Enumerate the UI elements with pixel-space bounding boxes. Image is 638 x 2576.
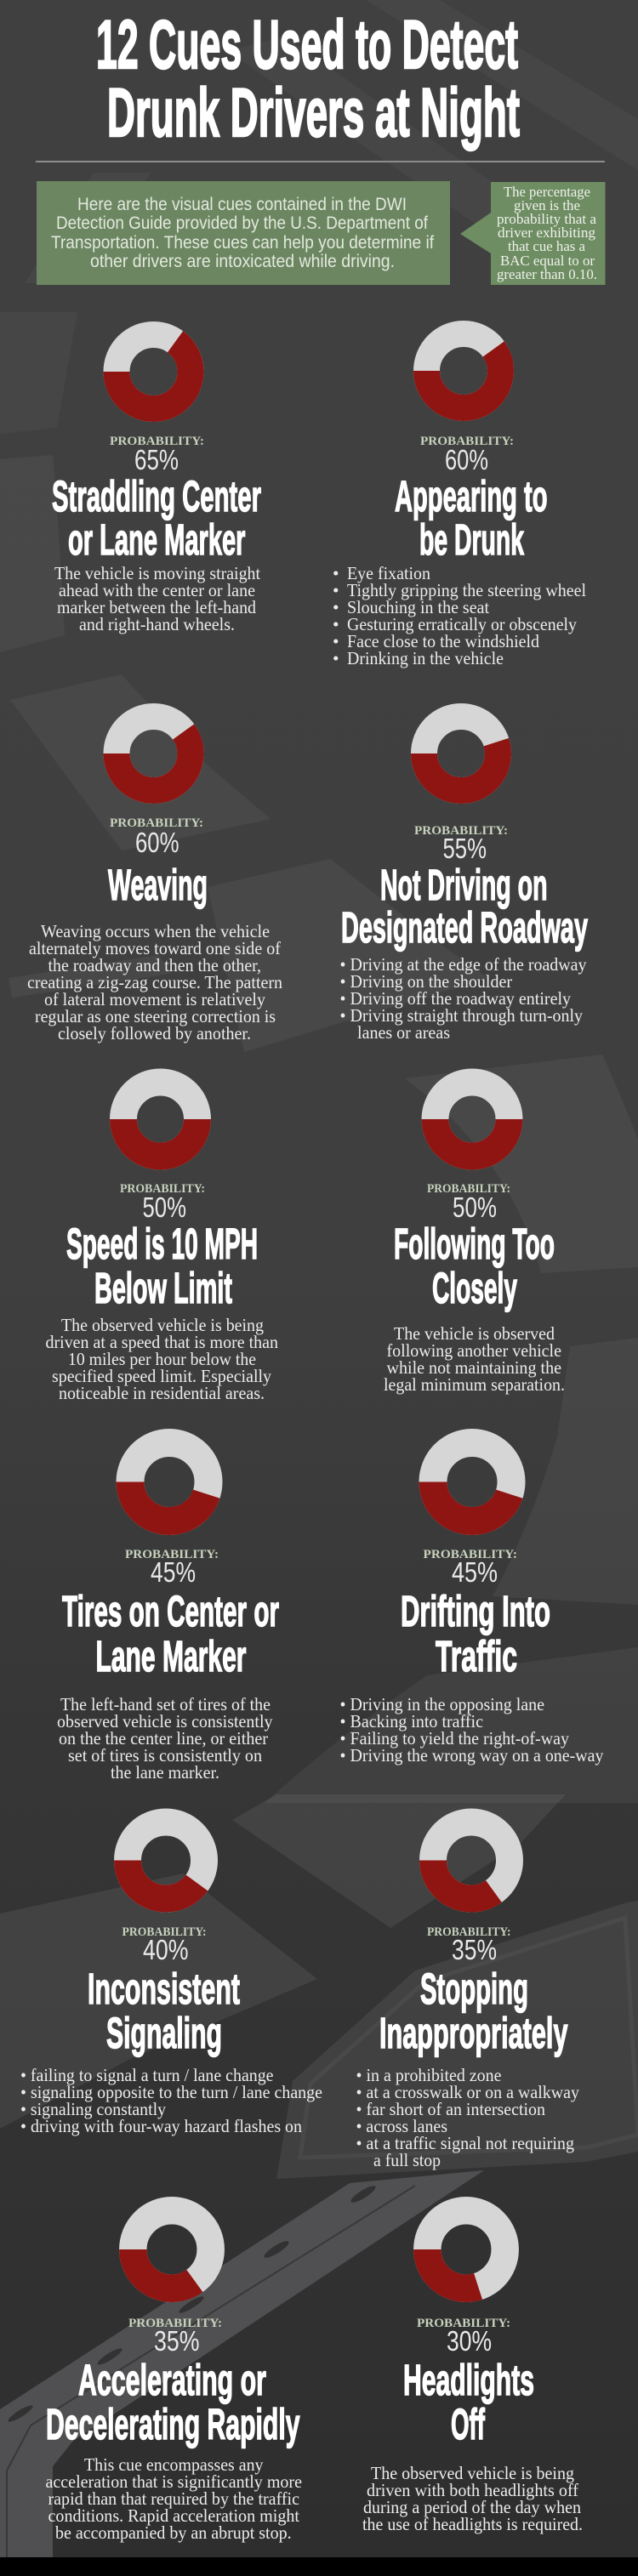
intro panel: Here are the visual cues contained in the DWI xyxy=(77,195,407,214)
description: rapid than that required by the traffic xyxy=(48,2488,299,2509)
description: creating a zig-zag course. The pattern xyxy=(27,972,282,992)
bullet list: Drinking in the vehicle xyxy=(347,648,504,668)
bullet list: • Driving off the roadway entirely xyxy=(340,988,571,1009)
description: Weaving occurs when the vehicle xyxy=(41,921,270,941)
probability value: 35% xyxy=(452,1934,497,1965)
bullet list: • Backing into traffic xyxy=(340,1711,483,1732)
bullet list: Slouching in the seat xyxy=(347,597,489,617)
bullet list: Eye fixation xyxy=(347,563,430,583)
panel: Weaving xyxy=(27,716,282,1043)
probability value: 55% xyxy=(442,833,487,864)
heading: Signaling xyxy=(106,2009,222,2057)
description: while not maintaining the xyxy=(386,1357,561,1378)
donut 50% xyxy=(123,1082,197,1157)
heading: Stopping xyxy=(420,1965,528,2013)
bullet list: lanes or areas xyxy=(357,1022,450,1043)
description: on the the center line, or either xyxy=(59,1728,268,1749)
donut 50% xyxy=(436,1082,509,1157)
bullet list xyxy=(356,2065,579,2170)
bullet list: • xyxy=(333,614,339,634)
heading xyxy=(395,472,548,564)
probability value: 50% xyxy=(453,1191,497,1223)
donut 35% xyxy=(433,1822,510,1898)
donut 45% xyxy=(130,1442,208,1521)
probability value: 50% xyxy=(143,1191,186,1223)
description: during a period of the day when xyxy=(363,2497,581,2517)
description: the use of headlights is required. xyxy=(362,2514,583,2534)
panel: Not Driving on Designated Roadway xyxy=(340,716,588,1043)
probability value: 60% xyxy=(445,444,488,475)
probability label: PROBABILITY: xyxy=(420,435,514,448)
bullet list: • signaling constantly xyxy=(20,2099,166,2119)
bullet list: • Driving on the shoulder xyxy=(340,971,512,992)
probability label: PROBABILITY: xyxy=(110,435,204,448)
probability value: 30% xyxy=(447,2325,492,2357)
probability value: 40% xyxy=(143,1934,189,1965)
bullet list xyxy=(333,563,586,668)
probability value: 65% xyxy=(134,444,179,475)
bullet list: • xyxy=(333,597,339,617)
heading: Off xyxy=(451,2400,486,2448)
description: The observed vehicle is being xyxy=(61,1315,264,1335)
panel: Inconsistent Signaling xyxy=(20,1822,322,2136)
bullet list: • Failing to yield the right-of-way xyxy=(340,1728,569,1749)
probability label: PROBABILITY: xyxy=(417,2317,510,2330)
description: The left-hand set of tires of the xyxy=(60,1694,271,1714)
bullet list: Gesturing erratically or obscenely xyxy=(347,614,577,634)
donut 60% xyxy=(427,333,500,408)
description: The observed vehicle is being xyxy=(371,2463,574,2483)
bullet list: • Driving in the opposing lane xyxy=(340,1694,544,1714)
heading xyxy=(62,1587,279,1680)
intro panel xyxy=(37,181,450,285)
heading: Lane Marker xyxy=(95,1632,247,1680)
description: The vehicle is observed xyxy=(394,1323,555,1344)
panel: Following Too Closely xyxy=(384,1082,565,1395)
donut 35% xyxy=(133,2210,211,2289)
description: marker between the left-hand xyxy=(57,597,256,617)
heading: Closely xyxy=(432,1264,517,1312)
heading: Headlights xyxy=(403,2356,534,2404)
bullet list: • xyxy=(333,563,339,583)
donut 45% xyxy=(433,1442,511,1521)
bullet list: • far short of an intersection xyxy=(356,2099,545,2119)
bullet list: • failing to signal a turn / lane change xyxy=(20,2065,274,2085)
probability label: PROBABILITY: xyxy=(125,1548,219,1561)
probability label: PROBABILITY: xyxy=(122,1925,206,1939)
panel: Stopping Inappropriately xyxy=(356,1822,579,2170)
bullet list: Face close to the windshield xyxy=(347,631,539,651)
probability label: PROBABILITY: xyxy=(427,1182,510,1196)
heading: be Drunk xyxy=(419,515,524,564)
heading xyxy=(403,2356,534,2448)
bullet list: • at a traffic signal not requiring xyxy=(356,2133,574,2153)
description xyxy=(57,1694,273,1783)
description: set of tires is consistently on xyxy=(68,1745,262,1766)
donut 55% xyxy=(424,716,498,791)
bullet list: • in a prohibited zone xyxy=(356,2065,502,2085)
heading xyxy=(379,1965,568,2057)
description: the lane marker. xyxy=(111,1762,219,1783)
description: noticeable in residential areas. xyxy=(59,1383,265,1403)
bullet list: • signaling opposite to the turn / lane change xyxy=(20,2082,322,2102)
description: This cue encompasses any xyxy=(84,2454,264,2475)
heading: Straddling Center xyxy=(52,472,261,520)
description xyxy=(27,921,282,1043)
description: be accompanied by an abrupt stop. xyxy=(55,2522,292,2543)
description: 10 miles per hour below the xyxy=(68,1349,256,1369)
donut 30% xyxy=(427,2210,505,2289)
description: ahead with the center or lane xyxy=(59,580,255,600)
heading xyxy=(46,2356,300,2448)
heading xyxy=(88,1965,240,2057)
description: alternately moves toward one side of xyxy=(29,938,282,958)
bullet list: • driving with four-way hazard flashes on xyxy=(20,2116,302,2136)
side note with arrow xyxy=(460,182,606,285)
bullet list: • xyxy=(333,580,339,600)
probability label: PROBABILITY: xyxy=(414,824,508,838)
heading: Tires on Center or xyxy=(62,1587,279,1635)
heading: Accelerating or xyxy=(78,2356,266,2404)
bullet list: • at a crosswalk or on a walkway xyxy=(356,2082,579,2102)
intro panel: Transportation. These cues can help you determine if xyxy=(51,233,434,253)
side note with arrow: that cue has a xyxy=(508,238,586,254)
probability value: 45% xyxy=(452,1556,498,1588)
bullet list: • Driving straight through turn-only xyxy=(340,1005,583,1026)
panel: Headlights Off xyxy=(362,2210,583,2534)
heading: Speed is 10 MPH xyxy=(66,1220,258,1268)
bullet list xyxy=(340,954,587,1043)
heading: Decelerating Rapidly xyxy=(46,2400,300,2448)
probability label: PROBABILITY: xyxy=(427,1925,510,1939)
bullet list: a full stop xyxy=(373,2150,441,2170)
description: of lateral movement is relatively xyxy=(44,989,265,1009)
panel: Drifting Into Traffic xyxy=(340,1442,604,1766)
bullet list: Tightly gripping the steering wheel xyxy=(347,580,586,600)
bullet list: • xyxy=(333,648,339,668)
description xyxy=(384,1323,565,1395)
heading xyxy=(52,472,261,564)
heading xyxy=(401,1587,550,1680)
description xyxy=(54,563,260,634)
description: the roadway and then the other, xyxy=(48,955,261,975)
description: closely followed by another. xyxy=(58,1023,251,1043)
side note with arrow: given is the xyxy=(514,197,580,213)
donut 40% xyxy=(128,1822,204,1898)
heading xyxy=(394,1220,555,1312)
probability value: 35% xyxy=(154,2325,199,2357)
side note with arrow: driver exhibiting xyxy=(498,225,595,241)
heading: or Lane Marker xyxy=(68,515,246,564)
side note with arrow: BAC equal to or xyxy=(500,253,595,269)
description: conditions. Rapid acceleration might xyxy=(48,2505,299,2526)
description: driven at a speed that is more than xyxy=(46,1332,278,1352)
probability label: PROBABILITY: xyxy=(120,1182,205,1196)
description: regular as one steering correction is xyxy=(35,1006,276,1026)
donut 60% xyxy=(117,716,191,791)
description: The vehicle is moving straight xyxy=(54,563,260,583)
heading xyxy=(341,861,588,952)
bullet list: • Driving at the edge of the roadway xyxy=(340,954,587,975)
title xyxy=(96,7,520,151)
description: specified speed limit. Especially xyxy=(52,1366,271,1386)
bullet list xyxy=(20,2065,322,2136)
panel: Tires on Center or Lane Marker xyxy=(57,1442,279,1783)
intro panel: other drivers are intoxicated while driving. xyxy=(90,252,395,271)
panel: Straddling Center or Lane Marker xyxy=(52,335,261,634)
probability label: PROBABILITY: xyxy=(128,2317,222,2330)
description: acceleration that is significantly more xyxy=(46,2471,302,2492)
side note with arrow: probability that a xyxy=(497,211,597,227)
description: and right-hand wheels. xyxy=(79,614,235,634)
bullet list xyxy=(340,1694,604,1766)
heading: Inconsistent xyxy=(88,1965,240,2013)
description xyxy=(46,1315,278,1403)
panel: Accelerating or Decelerating Rapidly xyxy=(46,2210,302,2543)
bullet list: • xyxy=(333,631,339,651)
bullet list: • across lanes xyxy=(356,2116,447,2136)
description xyxy=(46,2454,302,2543)
panel: Speed is 10 MPH Below Limit xyxy=(46,1082,278,1403)
heading: Traffic xyxy=(436,1632,517,1680)
description: observed vehicle is consistently xyxy=(57,1711,273,1732)
panel: Appearing to be Drunk xyxy=(333,333,586,668)
probability value: 60% xyxy=(135,827,179,858)
description: driven with both headlights off xyxy=(367,2480,579,2500)
probability label: PROBABILITY: xyxy=(110,816,203,830)
description xyxy=(362,2463,583,2534)
heading xyxy=(66,1220,258,1312)
description: legal minimum separation. xyxy=(384,1374,565,1395)
probability value: 45% xyxy=(151,1556,196,1588)
probability label: PROBABILITY: xyxy=(424,1548,517,1561)
description: following another vehicle xyxy=(386,1340,561,1361)
intro panel: Detection Guide provided by the U.S. Department of xyxy=(56,213,428,233)
heading: Below Limit xyxy=(94,1264,232,1312)
heading: Weaving xyxy=(108,861,208,909)
side note with arrow: greater than 0.10. xyxy=(497,266,597,282)
donut 65% xyxy=(117,335,191,408)
side note with arrow: The percentage xyxy=(504,184,590,200)
bullet list: • Driving the wrong way on a one-way xyxy=(340,1745,604,1766)
